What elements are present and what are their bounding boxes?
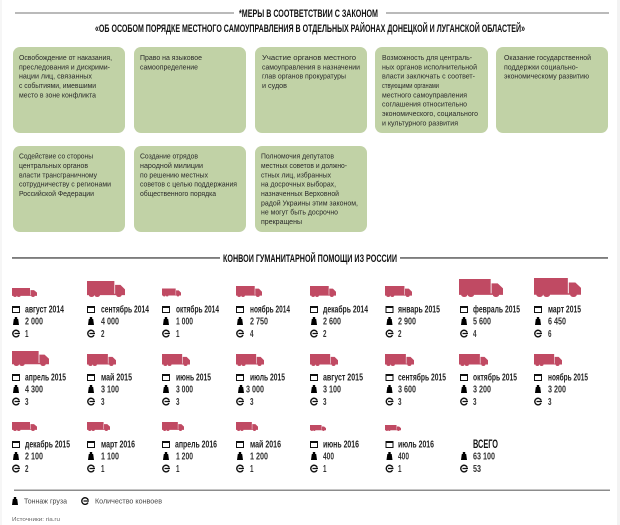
convoy: июнь 2015: июнь 2015 [176,372,211,384]
panel: освобождение от наказания: преследования и дискрими- [19,62,110,71]
convoy: август 2014: 2 000 [25,316,43,328]
convoy: май 2015 [87,354,132,408]
panel: полномочия депутатов: Полномочия депутатов [261,152,334,160]
panel: трансграничное сотрудничество: власти трансграничному [19,170,97,179]
convoy: март 2016: 1 100 [101,452,119,462]
panel: соглашения с центральными органами: экономического, социального [382,109,478,118]
convoy: июль 2016: июль 2016 [398,440,434,450]
panel: народная милиция [134,146,246,232]
convoy: июль 2016: 400 [398,452,409,462]
title [15,8,609,35]
convoy: май 2015: 3 [101,397,105,408]
convoy: сентябрь 2015 [385,354,446,408]
convoy: ноябрь 2015 [534,354,588,408]
convoy: ноябрь 2015: 3 [548,397,552,408]
convoy: январь 2015: 2 [398,329,402,340]
convoy: август 2014: 1 [25,329,29,340]
convoy: декабрь 2015 [12,422,70,475]
convoy: март 2016: март 2016 [101,440,135,450]
panel: народная милиция: по решению местных [140,170,208,179]
convoy: июль 2016 [385,425,434,475]
convoy: декабрь 2015: 2 100 [25,452,43,462]
convoy: апрель 2016 [162,422,217,475]
convoy: декабрь 2014: декабрь 2014 [323,304,368,316]
panel: соглашения с центральными органами: местного самоуправления [382,90,467,99]
panel: трансграничное сотрудничество: Содействие со стороны [19,152,93,160]
total: ВСЕГО [473,437,498,451]
convoy: сентябрь 2014: 4 000 [101,316,119,328]
panel: полномочия депутатов: прекращены [261,217,302,226]
panel: участие органов самоуправления [255,47,367,133]
convoy: март 2016 [87,422,135,475]
panel: право на языковое самоопределение [134,47,246,133]
convoy: май 2016: май 2016 [250,440,281,450]
convoy: октябрь 2015 [459,354,517,408]
convoy: сентябрь 2015: 3 600 [398,384,416,396]
convoy: март 2015: март 2015 [548,304,581,316]
convoy: ноябрь 2014: 2 750 [250,316,268,328]
convoy: сентябрь 2015: сентябрь 2015 [398,372,446,384]
convoy: апрель 2015 [12,351,66,408]
panel: полномочия депутатов [255,146,367,232]
convoy: август 2015: 3 100 [323,384,341,396]
convoy: октябрь 2014: 1 000 [176,316,193,328]
convoy: март 2015: 6 450 [548,316,566,328]
panel: соглашения с центральными органами [375,47,488,133]
panel: государственная поддержка: поддержки социально- [504,62,578,71]
convoy: апрель 2015: апрель 2015 [25,372,66,384]
bottom rule [14,490,610,491]
convoy: октябрь 2014 [162,288,219,340]
legend [12,497,162,506]
convoy: сентябрь 2014 [87,281,149,340]
convoy: март 2015: 6 [548,329,552,340]
convoy: октябрь 2015: 3 200 [473,384,491,396]
panel: полномочия депутатов: на досрочных выборах, [261,180,336,189]
convoy: март 2016: 1 [101,464,105,475]
panel: трансграничное сотрудничество: Российской Федерации [19,189,94,198]
convoy: октябрь 2014: октябрь 2014 [176,304,219,316]
convoy: июль 2016: 1 [398,464,402,475]
convoy: апрель 2015: 3 [25,397,29,408]
panel: трансграничное сотрудничество: сотрудничеству с регионами [19,180,111,189]
convoy: июнь 2015 [162,354,211,408]
convoy: май 2015: 3 100 [101,384,119,396]
panel: право на языковое самоопределение: самоопределение [140,62,198,71]
panel: трансграничное сотрудничество [13,146,125,232]
convoy: октябрь 2015: 3 [473,397,477,408]
panel: полномочия депутатов: назначенных Верховной [261,189,339,198]
convoy: январь 2015 [385,286,440,340]
panel: соглашения с центральными органами: ствующими органами [382,81,439,90]
total [461,437,498,475]
convoy: июль 2015: июль 2015 [250,372,285,384]
convoy: июнь 2016: июнь 2016 [323,440,359,450]
panel: освобождение от наказания [13,47,125,133]
convoy: июнь 2015: 3 [176,397,180,408]
convoy: август 2014 [12,288,64,340]
convoy: ноябрь 2014 [236,286,290,340]
panel: народная милиция: народной милиции [140,161,203,170]
convoy: февраль 2015 [459,279,520,340]
panel: государственная поддержка: Оказание государственной [504,53,591,62]
convoy: январь 2015: 2 900 [398,316,416,328]
panel: соглашения с центральными органами: ных органов исполнительной [382,62,477,71]
convoy: апрель 2016: 1 200 [176,452,193,462]
convoy: июнь 2016 [310,425,359,475]
convoy: сентябрь 2015: 3 [398,397,402,408]
panel: трансграничное сотрудничество: центральных органов [19,161,88,170]
panel: освобождение от наказания: с событиями, имевшими [19,81,96,90]
panel: участие органов самоуправления: и судов [262,81,287,90]
convoy: март 2015 [534,278,581,340]
panel: соглашения с центральными органами: и культурного развития [382,118,458,127]
convoy: август 2015: август 2015 [323,372,363,384]
convoy: февраль 2015: февраль 2015 [473,304,520,316]
panel: право на языковое самоопределение: Право на языковое [140,53,202,62]
convoy: сентябрь 2014: 2 [101,329,105,340]
convoy: декабрь 2014: 2 600 [323,316,341,328]
convoy: апрель 2016: апрель 2016 [175,440,217,450]
convoy: январь 2015: январь 2015 [398,304,440,316]
convoy: февраль 2015: 5 600 [473,316,491,328]
source: Источники: ria.ru [12,517,60,523]
panel: полномочия депутатов: стных лиц, избранных [261,170,331,179]
convoy: ноябрь 2015: ноябрь 2015 [548,372,588,384]
panel: участие органов самоуправления: Участие органов местного [262,53,356,62]
convoy: август 2014: август 2014 [25,304,64,316]
panel: полномочия депутатов: не могут быть досрочно [261,208,338,217]
convoy: ноябрь 2014: ноябрь 2014 [250,304,290,316]
panel: освобождение от наказания: нации лиц, связанных [19,72,92,81]
convoy: сентябрь 2014: сентябрь 2014 [101,304,149,316]
convoy: декабрь 2015: декабрь 2015 [25,438,70,450]
panel: народная милиция: Создание отрядов [140,152,198,160]
panel: соглашения с центральными органами: соглашения относительно [382,100,467,109]
panel: полномочия депутатов: местных советов и должно- [261,161,347,170]
title: *МЕРЫ В СООТВЕТСТВИИ С ЗАКОНОМ [239,8,378,20]
panel: народная милиция: общественного порядка [140,189,217,198]
convoy: апрель 2016: 1 [176,464,180,475]
total: 63 100 [473,452,495,462]
panel: народная милиция: советов с целью поддержания [140,180,237,189]
convoy: июль 2015: 3 [250,397,254,408]
convoy: июль 2015: 3 000 [246,384,264,396]
panel: соглашения с центральными органами: Возможность для централь- [382,53,472,62]
convoy: декабрь 2014: 2 [323,329,327,340]
convoy: июнь 2016: 400 [323,452,334,462]
panel: государственная поддержка [496,47,608,133]
convoy: апрель 2015: 4 300 [25,384,43,396]
convoy: май 2016: 1 200 [250,452,268,462]
convoy: октябрь 2015: октябрь 2015 [473,372,517,384]
panel: полномочия депутатов: радой Украины этим законом, [261,198,358,207]
convoy: август 2015 [310,354,363,408]
section heading: КОНВОИ ГУМАНИТАРНОЙ ПОМОЩИ ИЗ РОССИИ [223,252,397,265]
convoy: май 2016 [236,422,281,475]
panel: соглашения с центральными органами: власти заключать с соответ- [382,72,475,81]
convoy: июнь 2015: 3 000 [176,384,193,396]
panel: участие органов самоуправления: глав органов прокуратуры [262,72,346,81]
convoy: февраль 2015: 4 [473,329,477,340]
panel: государственная поддержка: экономическому развитию [504,72,589,81]
legend: Тоннаж груза [24,498,67,506]
convoy: июнь 2016: 1 [323,464,327,475]
legend: Количество конвоев [95,498,162,506]
convoy: август 2015: 3 [323,397,327,408]
panel: участие органов самоуправления: самоуправления в назначении [262,62,360,71]
convoy: май 2015: май 2015 [101,372,132,384]
convoy: октябрь 2014: 1 [176,329,180,340]
panel: освобождение от наказания: место в зоне конфликта [19,90,97,99]
convoy: июль 2015 [236,354,285,408]
panel: освобождение от наказания: Освобождение от наказания, [19,53,112,62]
total: 53 [473,464,481,475]
convoy: декабрь 2015: 2 [25,464,29,475]
convoy: ноябрь 2015: 3 200 [548,384,566,396]
convoy: ноябрь 2014: 4 [250,329,254,340]
convoy: май 2016: 1 [250,464,254,475]
convoy: декабрь 2014 [310,286,368,340]
